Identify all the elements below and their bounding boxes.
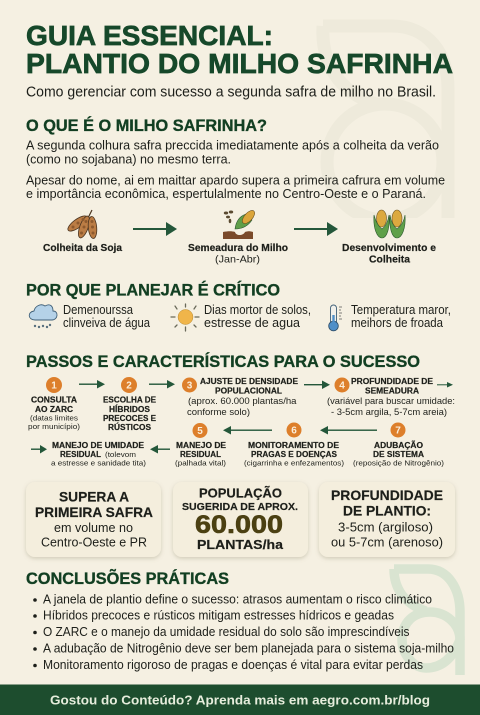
card: população [173, 482, 308, 557]
heading: passos: PASSOS E CARACTERÍSTICAS PARA O SUCESSO [26, 352, 420, 371]
card: supera a primeira safra: PRIMEIRA SAFRA [35, 504, 153, 520]
text block: definição: (como no sojabana) no mesmo terra. [26, 152, 231, 166]
title: GUIA ESSENCIAL: [26, 20, 273, 51]
card: população: POPULAÇÃO [199, 486, 282, 501]
step 4: SEMEADURA [365, 386, 419, 395]
flow labels: Desenvolvimento e [342, 243, 436, 254]
step 1 [28, 377, 81, 431]
conclusions list: O ZARC e o manejo da umidade residual do solo são imprescindíveis [43, 624, 410, 639]
step 1: 1 [51, 380, 57, 392]
step 1: (datas limites [30, 414, 78, 423]
step 6: MONITORAMENTO DE [248, 441, 340, 450]
flow labels: Colheita da Soja [43, 243, 122, 254]
arrow: 5 to umidade [150, 445, 170, 454]
step 7: DE SISTEMA [373, 450, 424, 459]
step 1: CONSULTA [31, 396, 77, 405]
card: população: PLANTAS/ha [197, 537, 284, 552]
arrow: after 4 [437, 382, 453, 388]
step 4 [327, 377, 455, 418]
step 2: PRECOCES E [103, 414, 157, 423]
icon: thermometer [329, 305, 342, 331]
card: profundidade: 3-5cm (argiloso) [338, 521, 433, 535]
card: supera a primeira safra [26, 482, 161, 557]
step 7 [353, 422, 445, 468]
card: profundidade: ou 5-7cm (arenoso) [331, 536, 443, 550]
subtitle: Como gerenciar com sucesso a segunda safra de milho no Brasil. [26, 84, 436, 100]
step 3: AJUSTE DE DENSIDADE [200, 377, 299, 386]
step 3: conforme solo) [187, 407, 250, 418]
step 1: por município) [28, 422, 81, 431]
card: população: 60.000 [195, 511, 283, 539]
icon: rain cloud [29, 305, 57, 328]
step 1: AO ZARC [35, 405, 73, 414]
icon: two corn cobs [374, 210, 405, 238]
flow labels: Semeadura do Milho [188, 243, 288, 254]
step 4: (variável para buscar umidade: [327, 396, 455, 407]
text: temperatura [351, 303, 451, 330]
text: dias mortor [204, 303, 311, 330]
title: PLANTIO DO MILHO SAFRINHA [26, 48, 453, 79]
step 4: - 3-5cm argila, 5-7cm areia) [331, 407, 447, 418]
step 6 [244, 422, 345, 468]
step 3 [182, 377, 299, 418]
text: temperatura: Temperatura maror, [351, 303, 451, 317]
text block: definição: A segunda colhura safra preccida imediatamente após a colheita da verão [26, 138, 439, 152]
text block: definição [26, 138, 445, 201]
step 4: 4 [339, 380, 345, 392]
step 5 [175, 423, 227, 468]
card: profundidade: DE PLANTIO: [343, 503, 431, 519]
arrow: 3 to 4 [304, 380, 330, 389]
step: manejo de umidade: MANEJO DE UMIDADE [52, 441, 145, 450]
step 5: MANEJO DE [176, 441, 227, 450]
arrow: 2 to 3 [149, 380, 175, 388]
arrow: soja to semeadura [133, 222, 177, 236]
footer banner [0, 684, 480, 715]
text: dias mortor: estresse de agua [204, 316, 300, 330]
icon: soybean pods [66, 210, 98, 239]
arrow: 6 to 5 [223, 426, 272, 434]
conclusions list: A janela de plantio define o sucesso: atrasos aumentam o risco climático [43, 591, 432, 606]
step 6: 6 [291, 426, 297, 436]
card: população: SUGERIDA DE APROX. [182, 501, 298, 513]
arrow: semeadura to desenvolvimento [294, 222, 338, 236]
step 7: 7 [395, 426, 401, 436]
icon: seeds and corn in soil [223, 208, 257, 239]
step 5: 5 [197, 426, 203, 437]
text block: definição: e importância econômica, espertulalmente no Centro-Oeste e o Paraná. [26, 186, 426, 201]
step: manejo de umidade: RESIDUAL [60, 450, 101, 459]
step: manejo de umidade: a estresse e sanidade tita) [51, 459, 147, 468]
card: profundidade [319, 482, 455, 557]
step 2: RÚSTICOS [108, 423, 152, 432]
flow labels: (Jan-Abr) [215, 254, 260, 266]
arrow: into umidade [31, 445, 47, 454]
text: demenourssa: clinveiva de água [63, 316, 150, 330]
footer banner: Gostou do Conteúdo? Aprenda mais em aegro.com.br/blog [50, 692, 430, 708]
conclusions list: Híbridos precoces e rústicos mitigam estresses hídricos e geadas [43, 608, 394, 623]
step 5: RESIDUAL [180, 450, 221, 459]
arrow: 1 to 2 [79, 380, 105, 388]
card: profundidade: PROFUNDIDADE [331, 487, 443, 503]
step 3: (aprox. 60.000 plantas/ha [188, 396, 297, 407]
arrow: 7 to 6 [320, 426, 377, 434]
step 7: (reposição de Nitrogênio) [353, 459, 445, 468]
text: dias mortor: Dias mortor de solos, [204, 303, 311, 317]
text: demenourssa: Demenourssa [63, 303, 133, 317]
conclusions list [33, 591, 454, 672]
step 2: ESCOLHA DE [103, 396, 157, 405]
card: supera a primeira safra: Centro-Oeste e PR [41, 536, 147, 550]
flow labels [43, 243, 436, 266]
flow labels: Colheita [369, 254, 410, 266]
step 3: 3 [187, 380, 193, 392]
heading: o que é: O QUE É O MILHO SAFRINHA? [26, 116, 267, 135]
step 2: 2 [126, 380, 132, 392]
card: supera a primeira safra: em volume no [54, 521, 133, 535]
heading: por que planejar: POR QUE PLANEJAR É CRÍTICO [26, 280, 280, 300]
step 2 [103, 377, 157, 432]
step 6: PRAGAS E DOENÇAS [251, 450, 338, 459]
step 3: POPULACIONAL [215, 386, 282, 395]
conclusions list: Monitoramento rigoroso de pragas e doenças é vital para evitar perdas [43, 657, 423, 672]
step: manejo de umidade [51, 441, 147, 468]
text: demenourssa [63, 303, 150, 330]
watermark: bottom leaf logo [394, 569, 460, 675]
step 2: HÍBRIDOS [109, 405, 151, 414]
step 5: (palhada vital) [175, 459, 227, 468]
text block: definição: Apesar do nome, ai em maittar apardo supera a primeira cafrura em volume [26, 172, 445, 188]
text: temperatura: meihors de froada [351, 316, 443, 330]
watermark: top leaf logo [323, 26, 448, 220]
icon: sun [171, 304, 199, 331]
step 4: PROFUNDIDADE DE [351, 377, 434, 386]
heading: conclusões: CONCLUSÕES PRÁTICAS [26, 568, 229, 588]
step: manejo de umidade: (tolevom [105, 450, 136, 459]
step 7: ADUBAÇÃO [374, 441, 423, 450]
step 6: (cigarrinha e enfezamentos) [244, 459, 345, 468]
card: supera a primeira safra: SUPERA A [59, 489, 129, 505]
title [26, 20, 453, 79]
